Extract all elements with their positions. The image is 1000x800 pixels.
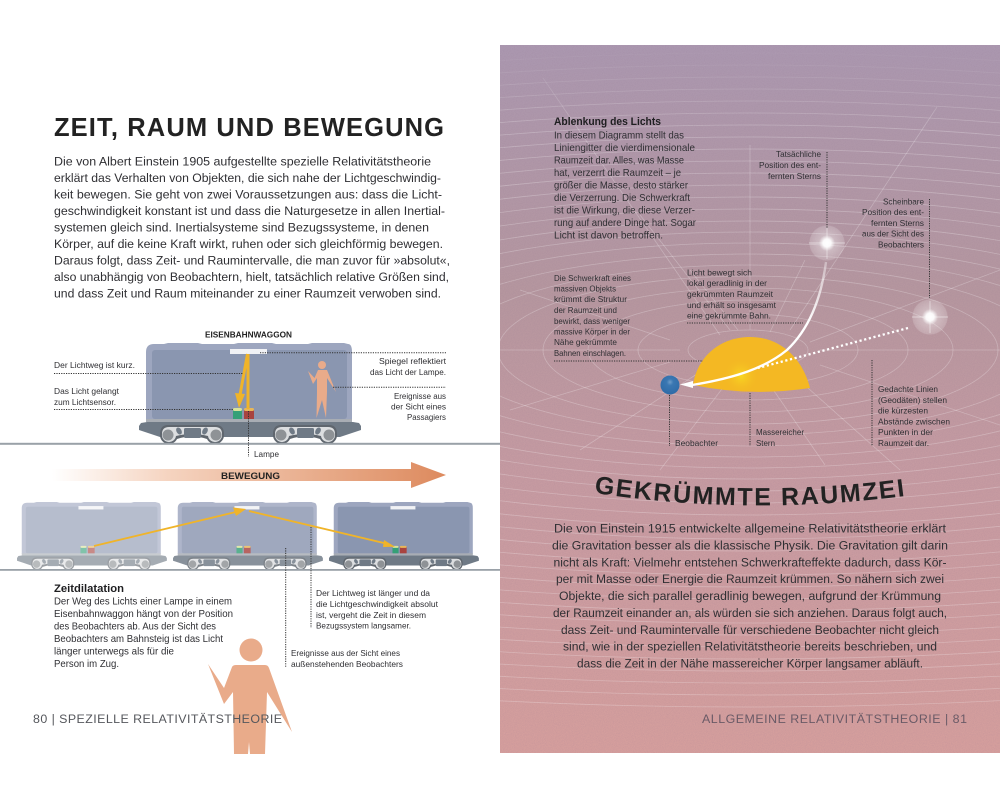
callouts: inside-train annotations — [54, 353, 447, 459]
callouts: spacetime diagram annotations: Abstände zwischen — [878, 416, 950, 426]
callouts: spacetime diagram annotations: fernten Sterns — [768, 171, 821, 181]
callouts: outside observer annotations: Der Lichtweg ist länger und da — [316, 588, 430, 598]
light path: lamp to mirror to sensor — [235, 354, 248, 409]
text block: special relativity intro: keit bewegen. Sie geht von zwei Voraussetzungen aus: dass die Licht- — [54, 188, 442, 202]
text block: special relativity intro: Die von Albert Einstein 1905 aufgestellte spezielle Relativitätstheorie — [54, 154, 431, 168]
footer: right page number: ALLGEMEINE RELATIVITÄTSTHEORIE | 81 — [702, 712, 967, 726]
train car: position two — [173, 502, 323, 570]
text block: special relativity intro: geschwindigkeit konstant ist und dass die Naturgesetze in allen Inertial- — [54, 204, 445, 218]
callouts: spacetime diagram annotations: Tatsächliche — [776, 149, 821, 159]
text block: special relativity intro: also unabhängig von Beobachtern, hielt, tatsächlich relative Größen sind, — [54, 270, 449, 284]
callouts: inside-train annotations: der Sicht eines — [391, 402, 446, 412]
callouts: inside-train annotations: Lampe — [254, 449, 279, 459]
callouts: outside observer annotations: ist, vergeht die Zeit in diesem — [316, 610, 426, 620]
text block: Ablenkung des Lichts: rung auf andere Dinge hat. Sogar — [554, 218, 696, 229]
text block: general relativity explanation: die Gravitation besser als die klassische Physik. Die Gravitation gilt darin — [552, 538, 948, 552]
text block: Ablenkung des Lichts: die Verzerrung. Die Schwerkraft — [554, 193, 690, 204]
callouts: spacetime diagram annotations: Punkten in der — [878, 427, 933, 437]
callouts: inside-train annotations: zum Lichtsensor. — [54, 397, 116, 407]
callouts: spacetime diagram annotations: Scheinbare — [883, 196, 924, 206]
text block: Ablenkung des Lichts: hat, verzerrt die Raumzeit – je — [554, 168, 681, 179]
text block: Ablenkung des Lichts: größer die Masse, desto stärker — [554, 180, 688, 191]
callouts: spacetime diagram annotations: Bahnen einschlagen. — [554, 348, 626, 358]
footer: left page number: 80 | SPEZIELLE RELATIVITÄTSTHEORIE — [33, 712, 282, 726]
callouts: spacetime diagram annotations: Position des ent- — [759, 160, 821, 170]
train car: position one — [17, 502, 167, 570]
callouts: spacetime diagram annotations: die kürzesten — [878, 406, 928, 416]
callouts: inside-train annotations: Ereignisse aus — [394, 391, 446, 401]
callouts: spacetime diagram annotations: Stern — [756, 438, 775, 448]
callouts: spacetime diagram annotations: und erhält so insgesamt — [687, 300, 777, 310]
callouts: spacetime diagram annotations: Massereicher — [756, 427, 804, 437]
light path: external observer view — [94, 508, 395, 547]
guide: curved title baseline — [592, 492, 912, 505]
text block: general relativity explanation: sind, wie in der speziellen Relativitätstheorie bereits beschrieben, und — [563, 640, 937, 654]
callouts: spacetime diagram annotations: lokal geradlinig in der — [687, 278, 767, 288]
callouts: spacetime diagram annotations: Nähe gekrümmte — [554, 337, 617, 347]
text block: special relativity intro: und dass Zeit und Raum miteinander zu einer Raumzeit verwoben sind. — [54, 286, 441, 300]
text block: general relativity explanation — [552, 522, 948, 670]
text block: Ablenkung des Lichts: In diesem Diagramm stellt das — [554, 130, 684, 141]
callouts: outside observer annotations: außenstehenden Beobachters — [291, 659, 403, 669]
text block: Zeitdilatation: Beobachters am Bahnsteig ist das Licht — [54, 634, 223, 645]
text block: Zeitdilatation: Zeitdilatation — [54, 583, 124, 595]
text block: general relativity explanation: Objekte, die sich parallel geradlinig bewegen, aufgrund der Krümmung — [559, 589, 941, 603]
callouts: spacetime diagram annotations: Die Schwerkraft eines — [554, 273, 631, 283]
arrow: curved real light path — [680, 262, 826, 388]
callouts: spacetime diagram annotations: gekrümmten Raumzeit — [687, 289, 774, 299]
callouts: spacetime diagram annotations: Raumzeit dar. — [878, 438, 929, 448]
text block: Ablenkung des Lichts — [554, 116, 696, 241]
callouts: spacetime diagram annotations: Licht bewegt sich — [687, 268, 752, 278]
text block: general relativity explanation: dass die Zeit in der Nähe massereicher Körper langsamer abläuft. — [577, 656, 923, 670]
icon: apparent star position — [912, 299, 948, 335]
callouts: spacetime diagram annotations: der Raumzeit und — [554, 305, 617, 315]
text block: general relativity explanation: nicht als Kraft: Vielmehr entstehen Schwerkrafteffekte dadurch, dass Kör- — [554, 555, 946, 569]
callouts: spacetime diagram annotations: aus der Sicht des — [862, 228, 924, 238]
icon: actual star position — [809, 225, 845, 261]
callouts: spacetime diagram annotations: bewirkt, dass weniger — [554, 316, 630, 326]
text block: general relativity explanation: per mit Masse oder Energie die Raumzeit krümmen. So nähern sich zwei — [556, 572, 944, 586]
text block: Ablenkung des Lichts: Licht ist davon betroffen. — [554, 230, 663, 241]
text block: special relativity intro: Körper, auf die keine Kraft wirkt, ruhen oder sich gleichförmig bewegen. — [54, 237, 443, 251]
callouts: inside-train annotations: das Licht der Lampe. — [370, 367, 446, 377]
rail: platform under main train — [0, 443, 500, 445]
heading: Eisenbahnwaggon: EISENBAHNWAGGON — [205, 330, 292, 340]
text block: Zeitdilatation: Eisenbahnwaggon hängt von der Position — [54, 609, 233, 620]
diagram: curved spacetime grid — [500, 70, 1000, 708]
callouts: spacetime diagram annotations: krümmt die Struktur — [554, 294, 627, 304]
callouts: spacetime diagram annotations: Position des ent- — [862, 207, 924, 217]
text block: Zeitdilatation — [54, 583, 233, 670]
diagram: massive star dome — [693, 337, 810, 394]
text block: special relativity intro: systemen gleich sind. Inertialsysteme sind Bezugssysteme, in denen — [54, 220, 429, 234]
icon: passenger head — [318, 361, 326, 369]
arrow: apparent light path — [758, 328, 908, 368]
icon: passenger — [308, 370, 336, 418]
text block: general relativity explanation: dass Zeit- und Raumintervalle für verschiedene Beobachter nicht gleich — [561, 623, 939, 637]
text block: Zeitdilatation: des Beobachters ab. Aus der Sicht des — [54, 622, 216, 632]
callouts: inside-train annotations: Der Lichtweg ist kurz. — [54, 360, 135, 370]
callouts: spacetime diagram annotations: Gedachte Linien — [878, 384, 938, 394]
text block: Zeitdilatation: Der Weg des Lichts einer Lampe in einem — [54, 596, 232, 608]
fade: grid fades near page top — [500, 45, 1000, 106]
icon: observer planet — [660, 376, 680, 394]
text block: Zeitdilatation: länger unterwegs als für die — [54, 646, 174, 658]
rail: platform under moving trains — [0, 569, 500, 571]
callouts: outside observer annotations: Bezugssystem langsamer. — [316, 620, 411, 630]
callouts: outside observer annotations — [286, 527, 439, 669]
callouts: spacetime diagram annotations: massive Körper in der — [554, 326, 630, 336]
callouts: spacetime diagram annotations: Beobachter — [675, 438, 718, 448]
text block: Ablenkung des Lichts: ist die Wirkung, die diese Verzer- — [554, 205, 695, 216]
callouts: spacetime diagram annotations: eine gekrümmte Bahn. — [687, 310, 771, 320]
title: Zeit, Raum und Bewegung: ZEIT, RAUM UND BEWEGUNG — [54, 114, 444, 142]
illustration: train car seen from inside — [139, 343, 361, 444]
train car: position three — [329, 502, 479, 570]
callouts: spacetime diagram annotations: massiven Objekts — [554, 284, 616, 294]
callouts: spacetime diagram annotations — [554, 149, 950, 448]
illustration: three moving train cars — [0, 502, 500, 571]
callouts: inside-train annotations: Das Licht gelangt — [54, 386, 120, 396]
text block: general relativity explanation: Die von Einstein 1915 entwickelte allgemeine Relativitätstheorie erklärt — [554, 522, 947, 536]
callouts: inside-train annotations: Passagiers — [407, 412, 446, 422]
text block: Zeitdilatation: Person im Zug. — [54, 659, 119, 670]
arrow: Bewegung: BEWEGUNG — [221, 471, 280, 482]
text block: general relativity explanation: der Raumzeit einander an, als würden sie sich anziehen. Daraus folgt auch, — [553, 606, 947, 620]
arrow: Bewegung — [52, 462, 446, 488]
callouts: spacetime diagram annotations: (Geodäten) stellen — [878, 395, 947, 405]
callouts: outside observer annotations: die Lichtgeschwindigkeit absolut — [316, 599, 439, 609]
text block: Ablenkung des Lichts: Ablenkung des Lichts — [554, 116, 661, 128]
panel: right page background — [500, 45, 1000, 753]
icon: outside observer figure — [208, 638, 292, 754]
callouts: outside observer annotations: Ereignisse aus der Sicht eines — [291, 648, 400, 658]
noise: paper grain — [500, 45, 1000, 753]
callouts: inside-train annotations: Spiegel reflektiert — [379, 356, 447, 366]
text block: special relativity intro: Daraus folgt, dass Zeit- und Raumintervalle, die man zuvor für »absolut«, — [54, 254, 450, 268]
text block: special relativity intro — [54, 154, 450, 300]
text block: special relativity intro: erklärt das Verhalten von Objekten, die sich nahe der Lichtgeschwindig- — [54, 171, 441, 185]
text block: Ablenkung des Lichts: Liniengitter die vierdimensionale — [554, 143, 695, 154]
callouts: spacetime diagram annotations: fernten Sterns — [871, 218, 924, 228]
callouts: spacetime diagram annotations: Beobachters — [878, 240, 924, 250]
text block: Ablenkung des Lichts: Raumzeit dar. Alles, was Masse — [554, 155, 684, 166]
